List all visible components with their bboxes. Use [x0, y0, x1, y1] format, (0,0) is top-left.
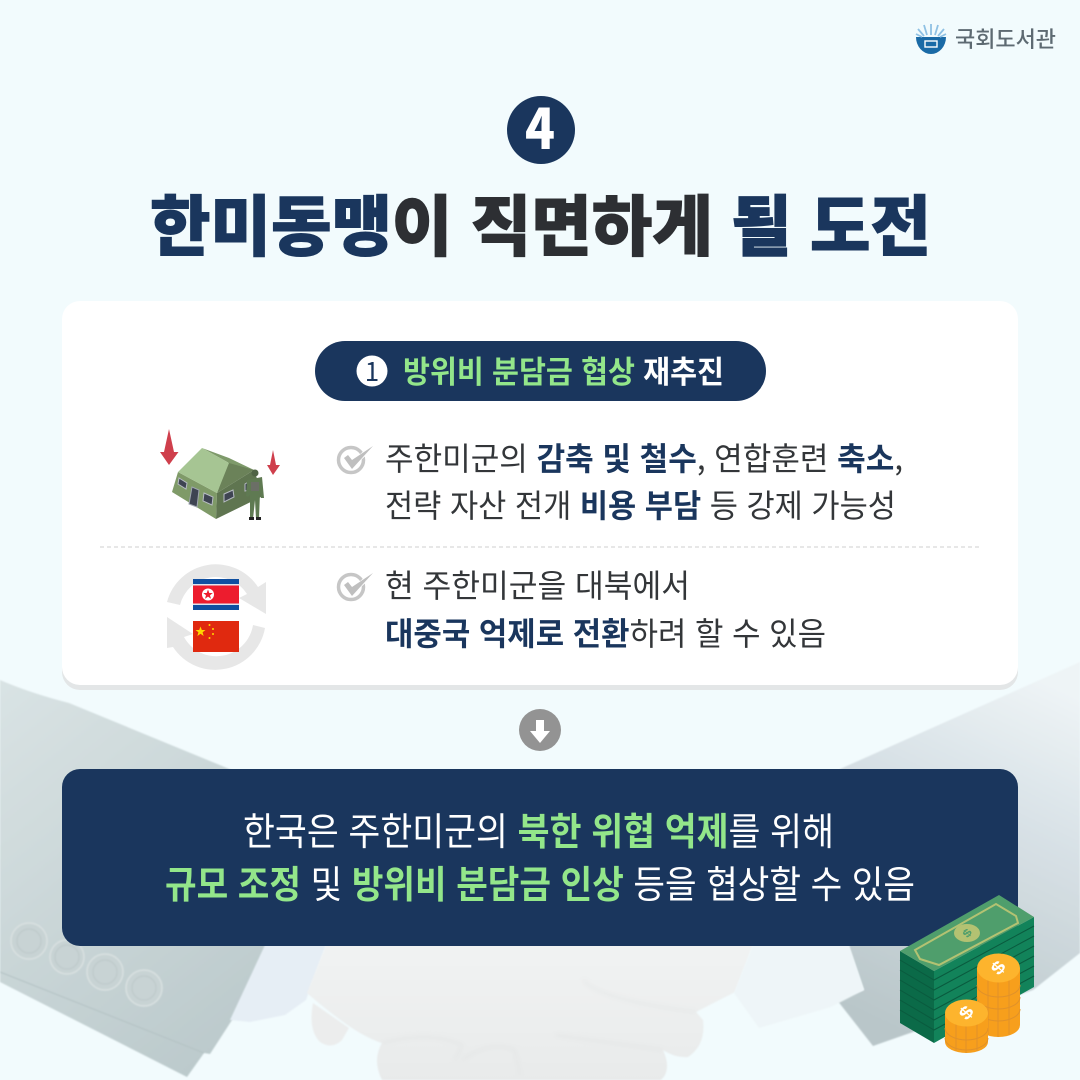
text: item 1 — [385, 434, 903, 527]
right shirt cuff — [734, 945, 864, 1028]
arrow down small — [267, 450, 280, 475]
line 2: 전략 자산 전개 비용 부담 등 강제 가능성 — [385, 481, 896, 527]
background: handshake photo — [0, 662, 1080, 1080]
door — [189, 487, 199, 507]
cycle arrows — [167, 564, 266, 670]
icon: money stack and coins: $ — [960, 926, 975, 940]
flag: China — [193, 621, 239, 652]
line 1: 현 주한미군을 대북에서 — [385, 561, 690, 607]
left jacket sleeve — [0, 680, 300, 1077]
jacket buttons — [11, 923, 162, 1006]
clasped hands — [307, 945, 753, 1080]
bills right face — [934, 917, 1034, 1043]
bill top — [900, 895, 1034, 971]
card shadow — [62, 310, 1018, 690]
soldier — [246, 470, 264, 520]
tent — [172, 448, 263, 519]
tall coin stack: $ — [987, 957, 1010, 979]
bills left face — [900, 951, 934, 1043]
flag: North Korea — [193, 579, 239, 610]
logo icon — [916, 24, 946, 54]
title: 한미동맹이 직면하게 될 도전 — [150, 174, 931, 270]
line 2: 대중국 억제로 전환하려 할 수 있음 — [385, 609, 826, 655]
panel: white card — [62, 301, 1018, 690]
left shirt cuff — [230, 945, 326, 1022]
right jacket sleeve — [837, 662, 1080, 1046]
short coin stack — [945, 1000, 988, 1053]
check icon 2 — [338, 573, 373, 600]
check icon 1 — [338, 446, 373, 472]
icon: money stack and coins — [900, 895, 1034, 1053]
pill heading — [315, 341, 766, 401]
pinky finger — [312, 1003, 349, 1046]
arrow: down circle — [519, 709, 561, 751]
finger creases — [382, 980, 696, 1075]
tall coin stack — [977, 954, 1020, 1037]
card body — [62, 301, 1018, 685]
arrow down large — [160, 429, 178, 465]
line 1: 주한미군의 감축 및 철수, 연합훈련 축소, — [385, 434, 903, 480]
logo text: 국회도서관 — [955, 22, 1056, 54]
icon: flags with cycle arrows — [167, 564, 266, 670]
bill stack lines — [900, 926, 1034, 1030]
number badge — [356, 352, 388, 389]
windows — [178, 478, 187, 489]
section number badge: 4 — [525, 85, 555, 166]
line 1: 한국은 주한미군의 북한 위협 억제를 위해 — [243, 801, 834, 856]
logo: National Assembly Library — [916, 22, 1056, 54]
section number badge — [507, 85, 575, 166]
line 2: 규모 조정 및 방위비 분담금 인상 등을 협상할 수 있음 — [165, 854, 915, 909]
panel: conclusion — [62, 769, 1018, 946]
bill seal — [954, 924, 980, 942]
pill text: 방위비 분담금 협상 재추진 — [403, 347, 724, 392]
text: item 2 — [385, 561, 826, 655]
number badge: 1 — [365, 352, 379, 389]
icon: tent and soldier with down arrows — [160, 429, 280, 520]
short coin stack: $ — [955, 1002, 978, 1024]
